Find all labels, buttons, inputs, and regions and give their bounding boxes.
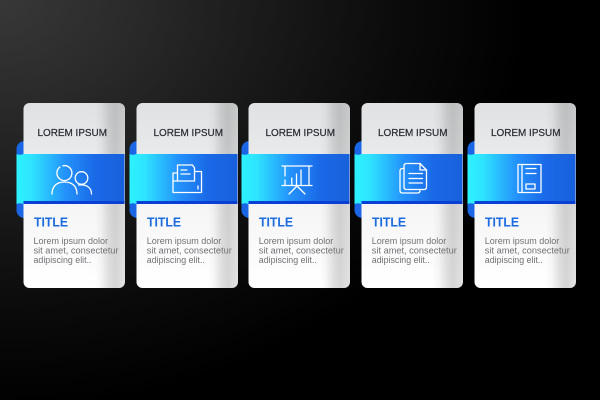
body text: sit amet, consectetur: [147, 246, 233, 256]
heading: LOREM IPSUM: [38, 128, 107, 139]
heading: LOREM IPSUM: [378, 128, 448, 139]
card body: [248, 103, 350, 288]
icon: notebook: [518, 164, 541, 192]
icon: documents: [400, 164, 426, 193]
ribbon tabs: [467, 141, 475, 218]
body text: adipiscing elit..: [34, 255, 92, 266]
body text: sit amet, consectetur: [372, 246, 458, 256]
card body: [362, 103, 463, 288]
body text: sit amet, consectetur: [259, 246, 345, 256]
title: TITLE: [147, 215, 181, 230]
panel: card 3: [241, 103, 350, 288]
icon: folder with document: [173, 165, 202, 192]
ribbon band: [130, 154, 238, 204]
card body: [136, 103, 238, 288]
heading: LOREM IPSUM: [266, 128, 335, 139]
ribbon band: [354, 154, 462, 204]
body text: [485, 236, 571, 266]
ribbon tabs: [129, 141, 137, 218]
body text: adipiscing elit..: [372, 255, 430, 266]
title: TITLE: [34, 215, 68, 230]
body text: adipiscing elit..: [147, 255, 205, 266]
icon: presentation board: [282, 166, 312, 194]
title: TITLE: [485, 215, 519, 230]
title: TITLE: [372, 215, 406, 230]
title: TITLE: [259, 215, 293, 230]
panel: card 4: [354, 103, 463, 288]
body text: adipiscing elit..: [259, 255, 317, 266]
panel: card 2: [129, 103, 238, 288]
ribbon tabs: [16, 141, 24, 218]
card body: [24, 103, 125, 288]
card body: [474, 103, 576, 288]
body text: [34, 236, 119, 266]
heading: LOREM IPSUM: [154, 128, 223, 139]
body text: [147, 236, 233, 266]
ribbon band: [16, 154, 124, 204]
ribbon tabs: [241, 141, 249, 218]
icon: people: [52, 166, 92, 194]
body text: Lorem ipsum dolor: [485, 236, 560, 247]
ribbon band: [468, 154, 576, 204]
ribbon band: [242, 154, 350, 204]
heading: LOREM IPSUM: [491, 128, 560, 139]
body text: Lorem ipsum dolor: [372, 236, 447, 247]
body text: Lorem ipsum dolor: [147, 236, 222, 247]
ribbon tabs: [354, 141, 362, 218]
body text: sit amet, consectetur: [34, 246, 119, 256]
body text: sit amet, consectetur: [485, 246, 571, 256]
panel: card 1: [16, 103, 125, 288]
body text: Lorem ipsum dolor: [259, 236, 334, 247]
panel: card 5: [467, 103, 576, 288]
body text: [372, 236, 458, 266]
body text: [259, 236, 345, 266]
body text: Lorem ipsum dolor: [34, 236, 109, 247]
body text: adipiscing elit..: [485, 255, 543, 266]
